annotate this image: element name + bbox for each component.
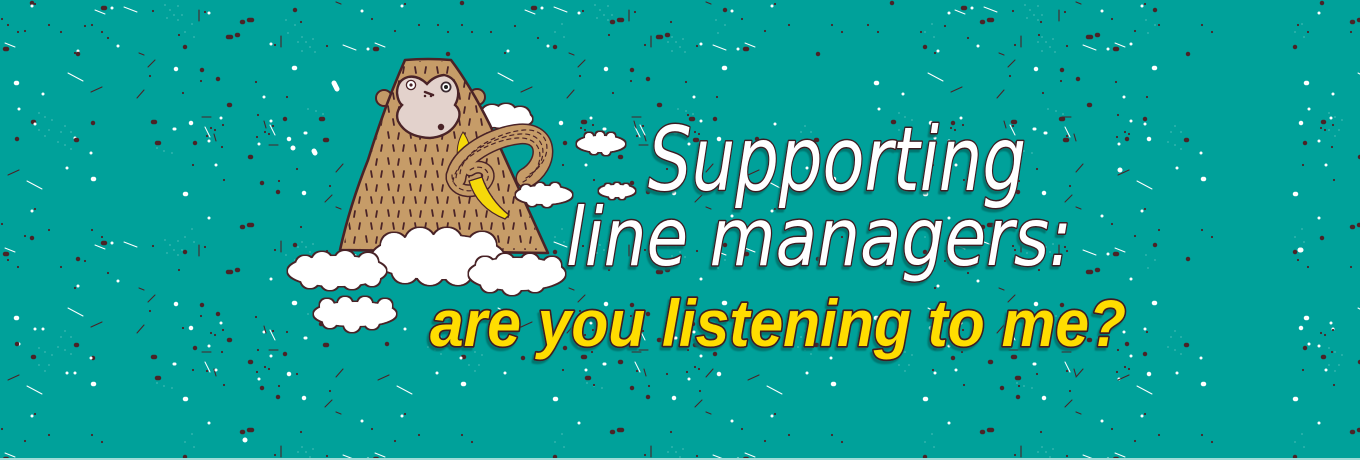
title line 1: Supporting xyxy=(648,108,1026,211)
tail xyxy=(452,130,547,191)
title line 2: line managers: xyxy=(566,191,1072,284)
cloud: left xyxy=(288,251,386,290)
cloud behind shoulder xyxy=(481,104,532,128)
cloud: lower left xyxy=(314,297,396,332)
icon: monkey xyxy=(340,59,548,253)
face xyxy=(397,75,460,138)
cloud: small lower xyxy=(599,183,635,199)
cloud: right xyxy=(469,254,565,295)
banana back xyxy=(457,132,470,162)
cloud: big centre xyxy=(372,228,504,285)
body xyxy=(340,59,548,253)
eyes, nose, mouth xyxy=(406,80,451,130)
title line 3: are you listening to me? xyxy=(430,286,1126,360)
banana front xyxy=(469,177,509,219)
cloud: small upper xyxy=(577,132,625,155)
cloud: by tail xyxy=(516,183,572,207)
ears xyxy=(376,89,485,106)
title xyxy=(430,108,1126,360)
body fur xyxy=(343,61,545,250)
